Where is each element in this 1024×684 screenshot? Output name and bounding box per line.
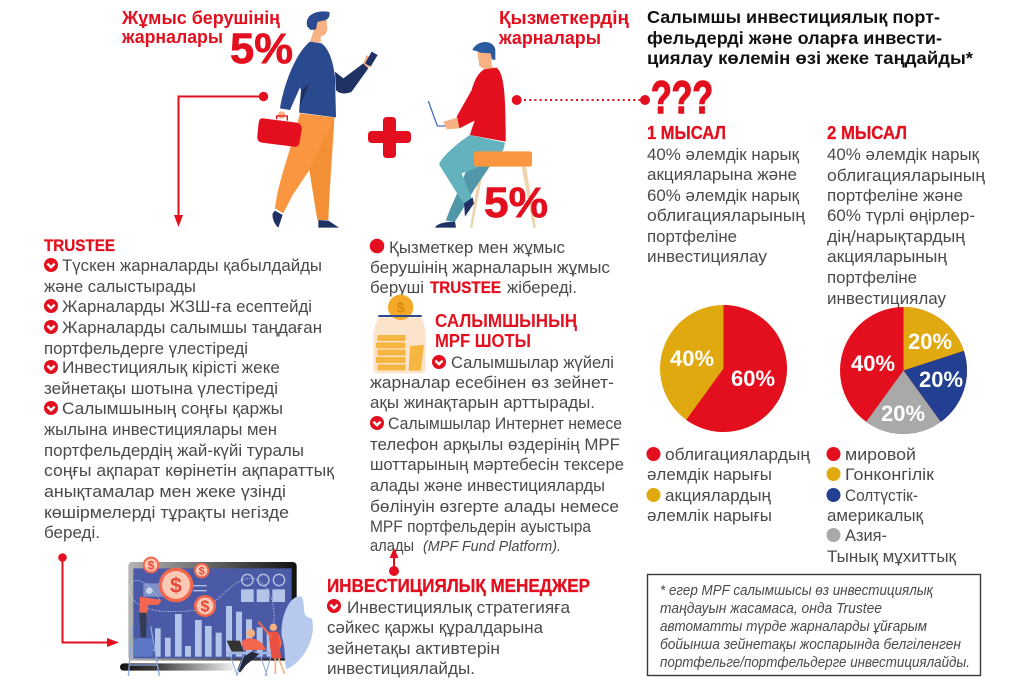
panel: example 2: облигацияларының (827, 166, 986, 185)
panel: trustee: Жарналарды ЖЗШ-ға есептейді (62, 297, 312, 316)
callout: footnote box: автоматты түрде жарналарды ұйғарым (660, 619, 927, 635)
panel: example 2: портфеліне (827, 268, 917, 287)
panel: example 1: портфеліне (647, 227, 737, 246)
panel: example 2: инвестициялау (827, 289, 946, 308)
legend: example 1: облигациялардың (665, 445, 811, 464)
panel: trustee: және салыстырады (44, 277, 196, 296)
panel: trustee: береді. (44, 523, 100, 542)
legend: example 2 (826, 445, 957, 566)
panel: trustee: анықтамалар мен жеке үзінді (44, 482, 286, 501)
big 5% employee: 5% (484, 179, 548, 227)
legend: example 2: Гонконгілік (845, 465, 935, 484)
account body text: ақы жинақтарын арттырады. (370, 393, 595, 412)
panel: investment manager: Инвестициялық стратегияға (347, 598, 571, 617)
pie chart: example 2: 20% (881, 401, 925, 426)
account body text: Салымшылар Интернет немесе (388, 414, 622, 433)
coins: $ (201, 599, 210, 616)
legend: example 2: америкалық (827, 506, 924, 525)
callout: footnote box (648, 574, 980, 676)
heading: contributor chooses portfolios: циялау көлемін өзі жеке таңдайды* (647, 48, 973, 68)
panel: contributor MPF account (370, 311, 624, 555)
pie chart: example 1 (660, 305, 787, 432)
account heading: MPF ШОТЫ (435, 331, 531, 351)
legend: example 2: Азия- (845, 526, 887, 545)
legend: example 2: Тынық мұхиттық (827, 547, 957, 566)
legend: example 1: әлемдік нарығы (647, 465, 772, 484)
question marks: ??? (651, 72, 713, 123)
legend: example 1 (646, 445, 811, 525)
heading: contributor chooses portfolios (647, 7, 973, 68)
panel: trustee: Жарналарды салымшы таңдаған (62, 318, 322, 337)
pie chart: example 1: 60% (731, 366, 775, 391)
legend: example 2: Солтүстік- (845, 486, 918, 505)
account body text: жарналар есебінен өз зейнет- (370, 373, 614, 392)
account body text: (MPF Fund Platform). (423, 538, 561, 555)
panel: example 2: портфеліне және (827, 186, 963, 205)
pie chart: example 2 (840, 307, 967, 434)
panel: example 1: облигацияларының (647, 206, 806, 225)
account body text: шоттарының мәртебесін тексере (370, 455, 624, 474)
panel: investment manager: зейнетақы активтерін (327, 639, 500, 658)
panel: trustee: зейнетақы шотына үлестіреді (44, 379, 278, 398)
illustration: investment chart on laptop (120, 557, 313, 676)
pie chart: example 1: 40% (670, 346, 714, 371)
panel: example 2 (827, 123, 986, 308)
account body text: алады және инвестицияларды (370, 476, 605, 495)
heading: employer contributions: Жұмыс берушінің (121, 8, 280, 28)
panel: example 1: 40% әлемдік нарық (647, 145, 800, 164)
panel: example 1 (647, 123, 806, 266)
illustration: employer man with suitcase (257, 11, 378, 228)
heading: employer contributions: жарналары (121, 27, 223, 47)
panel: trustee: Салымшының соңғы қаржы (62, 399, 283, 418)
red dot bullet (370, 239, 384, 253)
account heading: САЛЫМШЫНЫҢ (435, 311, 577, 331)
panel: example 2: 40% әлемдік нарық (827, 145, 980, 164)
panel: investment manager: инвестициялайды. (327, 659, 475, 678)
legend: example 1: әлемлік нарығы (647, 506, 772, 525)
heading: employee contributions: Қызметкердің (499, 8, 629, 28)
panel: trustee: жылына инвестициялары мен (44, 420, 277, 439)
panel: example 1: инвестициялау (647, 247, 767, 266)
arrow: manager to trustee (58, 553, 119, 647)
panel: trustee (44, 236, 335, 542)
heading: contributor chooses portfolios: Салымшы инвестициялық порт- (647, 7, 940, 27)
panel: trustee: портфельдердің жай-күйі туралы (44, 441, 304, 460)
account body text: телефон арқылы өздерінің MPF (370, 435, 620, 454)
pie chart: example 2: 40% (851, 351, 895, 376)
panel: employee contribution note: беруші (370, 278, 424, 297)
panel: trustee: көшірмелерді тұрақты негізде (44, 503, 289, 522)
heading: employee contributions (498, 8, 629, 48)
coins (143, 557, 216, 617)
panel: employee contribution note: TRUSTEE (430, 278, 501, 297)
coins: $ (199, 566, 205, 578)
coins: $ (170, 574, 182, 598)
account heading (435, 311, 577, 351)
panel: example 2: дің/нарықтардың (827, 227, 966, 246)
callout: footnote box: портфельге/портфельдерге инвестициялайды. (660, 655, 970, 671)
panel: trustee: Инвестициялық кірісті жеке (62, 358, 280, 377)
arrow: employer to trustee (174, 92, 268, 227)
icon: coin jar (373, 295, 426, 373)
pie chart: example 2: 20% (908, 329, 952, 354)
manager heading: ИНВЕСТИЦИЯЛЫҚ МЕНЕДЖЕР (327, 576, 590, 596)
legend: example 1: акциялардың (665, 486, 772, 505)
dotted connector to question marks (512, 95, 650, 105)
panel: example 2: акцияларының (827, 247, 948, 266)
heading: employee contributions: жарналары (498, 28, 601, 48)
panel: trustee: Түскен жарналарды қабылдайды (62, 256, 322, 275)
example 1 heading: 1 МЫСАЛ (647, 123, 726, 143)
coins: $ (148, 558, 155, 572)
example 2 heading: 2 МЫСАЛ (827, 123, 907, 143)
pie chart: example 2: 20% (919, 367, 963, 392)
plus sign (368, 117, 411, 158)
panel: example 2: 60% түрлі өңірлер- (827, 206, 975, 225)
account body text (370, 353, 624, 555)
illustration: employee on a stool with laptop (428, 42, 536, 228)
panel: example 1: акцияларына және (647, 165, 797, 184)
heading: employer contributions (121, 8, 293, 73)
callout: footnote box: бойынша зейнетақы жоспарында белгіленген (660, 637, 961, 653)
callout: footnote box: таңдауын жасамаса, онда Trustee (660, 601, 882, 617)
panel: employee contribution note: жібереді. (507, 278, 577, 297)
icon: coin jar: $ (397, 301, 405, 317)
account body text: MPF портфельдерін ауыстыра (370, 517, 591, 536)
panel: employee contribution note (370, 238, 610, 297)
legend: example 2: мировой (845, 445, 916, 464)
panel: trustee: соңғы ақпарат көрінетін ақпараттық (44, 461, 335, 480)
panel: employee contribution note: Қызметкер мен жұмыс (389, 238, 565, 257)
account body text: Салымшылар жүйелі (451, 353, 614, 372)
panel: trustee: портфельдерге үлестіреді (44, 339, 248, 358)
arrow: manager up to account (389, 548, 399, 576)
panel: example 1: 60% әлемдік нарық (647, 186, 800, 205)
panel: investment manager (327, 576, 590, 678)
trustee heading: TRUSTEE (44, 236, 115, 255)
account body text: бөлінуін өзгерте алады немесе (370, 497, 619, 516)
panel: investment manager: сәйкес қаржы құралдарына (327, 618, 544, 637)
callout: footnote box: * егер MPF салымшысы өз инвестициялық (660, 583, 934, 599)
account body text: алады (370, 536, 414, 555)
heading: employer contributions: 5% (230, 25, 293, 73)
panel: employee contribution note: берушінің жарналарын жұмыс (370, 258, 610, 277)
heading: contributor chooses portfolios: фельдерді және оларға инвести- (647, 28, 942, 48)
